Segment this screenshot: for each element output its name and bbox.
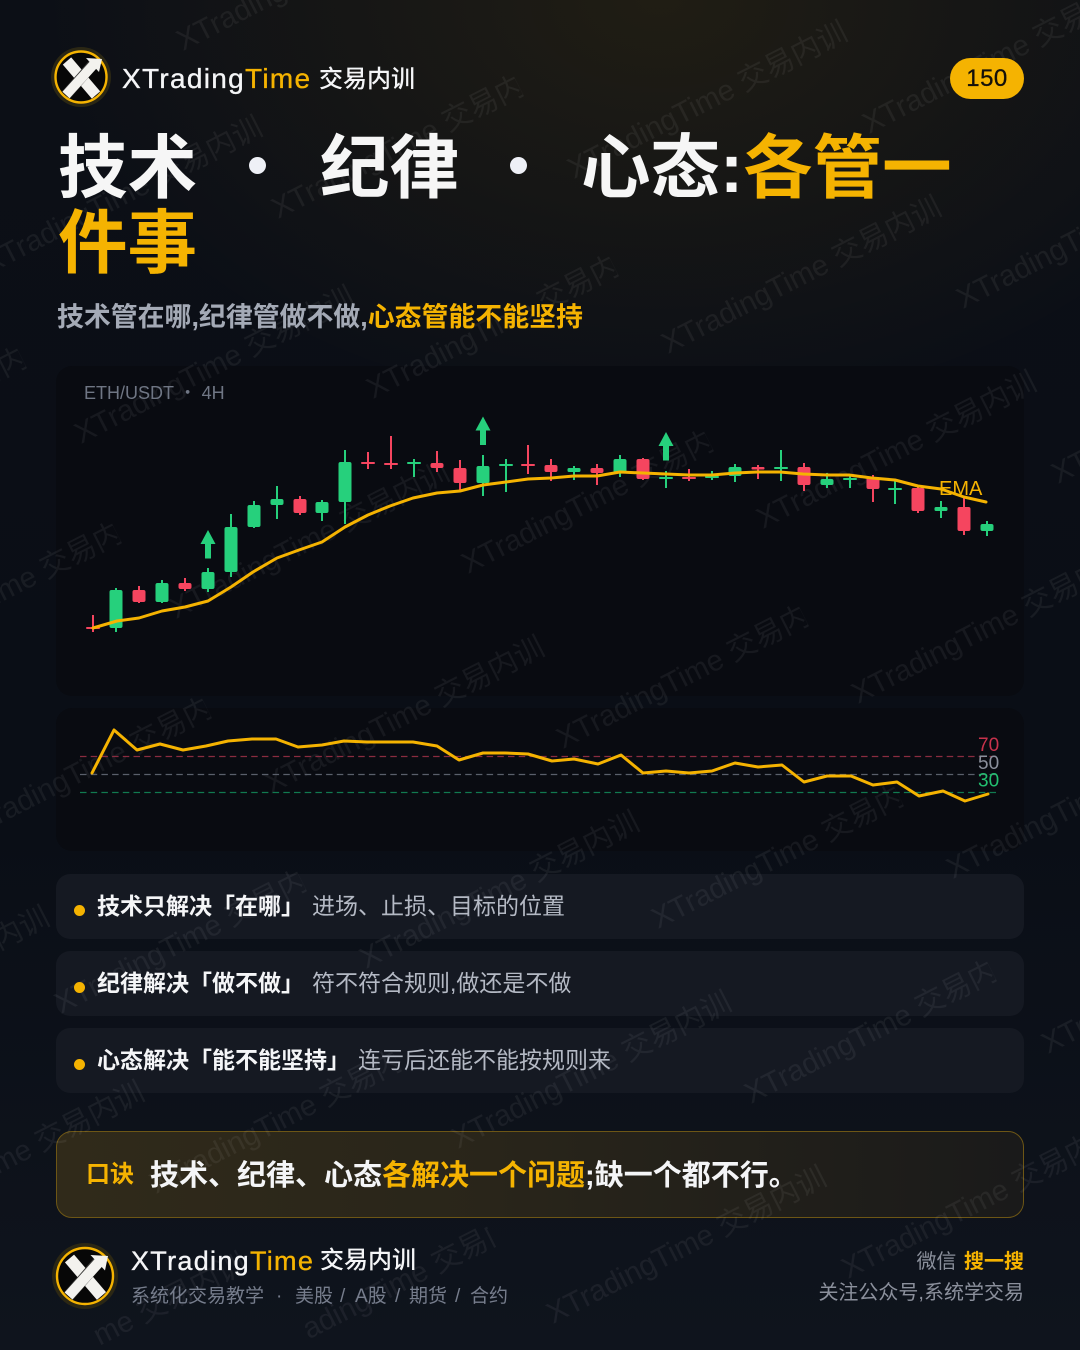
panel: RSI background <box>56 708 1024 851</box>
footer tagline: / <box>455 1286 460 1307</box>
footer follow line: 关注公众号,系统学交易 <box>818 1282 1024 1304</box>
panel: rule row 3 background <box>56 1028 1024 1093</box>
rule row 3 text <box>74 1047 611 1073</box>
watermark pattern: XTradingTime 交易内训 <box>551 585 842 755</box>
candlestick chart <box>86 416 994 632</box>
title: 心态:各管一 <box>581 129 952 207</box>
watermark pattern: me 交易内训 <box>88 1247 252 1350</box>
footer tagline: / <box>340 1286 345 1307</box>
footer tagline: · <box>276 1286 282 1307</box>
footer wechat line: 微信 搜一搜 <box>916 1251 1024 1273</box>
title <box>58 129 952 282</box>
rule row 1 text <box>74 893 565 919</box>
rule row 2 text: 符不符合规则,做还是不做 <box>312 970 571 996</box>
footer logo <box>52 1243 118 1309</box>
rule row 3 text: 连亏后还能不能按规则来 <box>358 1047 611 1073</box>
title: 件事 <box>58 204 197 282</box>
watermark pattern: XTradingTime 交易内训 <box>446 985 737 1155</box>
footer tagline: / <box>395 1286 400 1307</box>
watermark pattern: XTradingTime 交易内训 <box>739 940 1030 1110</box>
watermark pattern: XTradingTime 交易内训 <box>354 805 645 975</box>
rule row 2 text: 纪律解决「做不做」 <box>97 970 304 996</box>
watermark pattern: XTradingTime 交易内训 <box>456 410 747 580</box>
issue badge <box>950 58 1024 99</box>
footer tagline: 美股 <box>295 1286 333 1307</box>
header logo <box>51 47 111 107</box>
RSI chart: 70 <box>978 735 999 756</box>
watermark pattern: XTradingTime 交易内训 <box>164 455 455 625</box>
watermark pattern: XTradingTime 交易内训 <box>259 630 550 800</box>
footer tagline: A股 <box>355 1286 387 1307</box>
watermark pattern: XTradingTime 交易内训 <box>646 765 937 935</box>
rule row 1 text: 技术只解决「在哪」 <box>97 893 304 919</box>
watermark pattern: adingTime 交易内 <box>297 1210 520 1346</box>
panel: candlestick chart background <box>56 366 1024 696</box>
header brand name: XTradingTime <box>122 63 311 94</box>
EMA label: EMA <box>939 478 983 500</box>
subtitle: 技术管在哪,纪律管做不做,心态管能不能坚持 <box>57 302 583 332</box>
watermark pattern: XTradingTime 交易内训 <box>751 365 1042 535</box>
watermark pattern: XTradingTime 交易内训 <box>69 280 360 450</box>
panel: rule row 2 background <box>56 951 1024 1016</box>
title: 纪律 <box>320 129 459 207</box>
rule row 2 text <box>74 970 571 996</box>
watermark pattern: XTradingTime 交易内训 <box>49 850 340 1020</box>
footer brand suffix: 交易内训 <box>320 1247 416 1274</box>
footer tagline: 期货 <box>409 1286 447 1307</box>
rule row 3 text: 心态解决「能不能坚持」 <box>97 1047 350 1073</box>
callout label: 口诀 <box>86 1161 134 1188</box>
footer brand name: XTradingTime <box>131 1246 314 1276</box>
watermark pattern: XTradingTime 交易内训 <box>656 190 947 360</box>
watermark pattern: XTradingTime 交易内训 <box>361 235 652 405</box>
title: 技术 <box>58 129 197 207</box>
panel: rule row 1 background <box>56 874 1024 939</box>
chart label: ETH/USDT ・ 4H <box>84 383 225 403</box>
footer tagline: 系统化交易教学 <box>131 1286 264 1307</box>
header brand suffix: 交易内训 <box>319 66 415 93</box>
issue badge: 150 <box>966 65 1008 92</box>
EMA line <box>93 472 986 628</box>
watermark pattern: XTradingTime 交易内训 <box>541 1160 832 1330</box>
footer tagline: 合约 <box>470 1286 508 1307</box>
buy arrows <box>200 416 674 558</box>
rule row 1 text: 进场、止损、目标的位置 <box>312 893 565 919</box>
callout text: 技术、纪律、心态各解决一个问题;缺一个都不行。 <box>150 1160 798 1192</box>
RSI chart: 50 <box>978 753 999 774</box>
watermark pattern: XTradingTime 交易内训 <box>266 55 557 225</box>
watermark pattern: XTradingTime 交易内训 <box>144 1030 435 1200</box>
watermark pattern: XTradingTime 交易内训 <box>562 15 853 185</box>
RSI chart: 30 <box>978 770 999 792</box>
footer tagline <box>131 1286 508 1307</box>
RSI chart <box>80 728 999 802</box>
panel: mnemonic callout background <box>56 1131 1024 1218</box>
